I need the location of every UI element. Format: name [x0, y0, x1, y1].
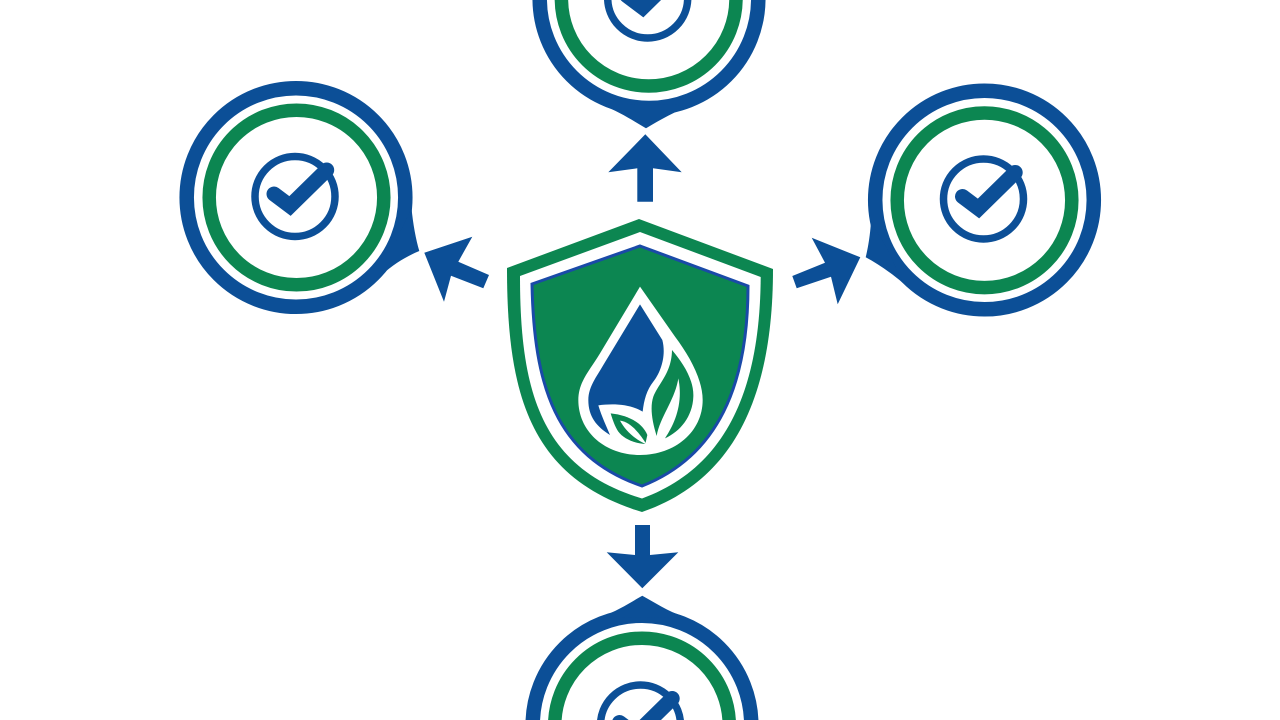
arrow: up-right: [792, 238, 860, 304]
shield: outer green border: [507, 219, 773, 512]
arrow: down: [607, 525, 678, 588]
arrow: up-left: [424, 237, 489, 302]
arrow: up: [608, 134, 682, 202]
pin: right check mark: [866, 91, 1094, 309]
shield: white band: [520, 232, 761, 498]
pin: top check mark: [540, 0, 758, 128]
icon: water drop with leaves: [578, 287, 703, 455]
pin: bottom check mark: [533, 596, 751, 720]
shield: inner green panel: [532, 246, 748, 486]
shield with water drop: [507, 219, 773, 512]
pin: left check mark: [187, 88, 419, 307]
